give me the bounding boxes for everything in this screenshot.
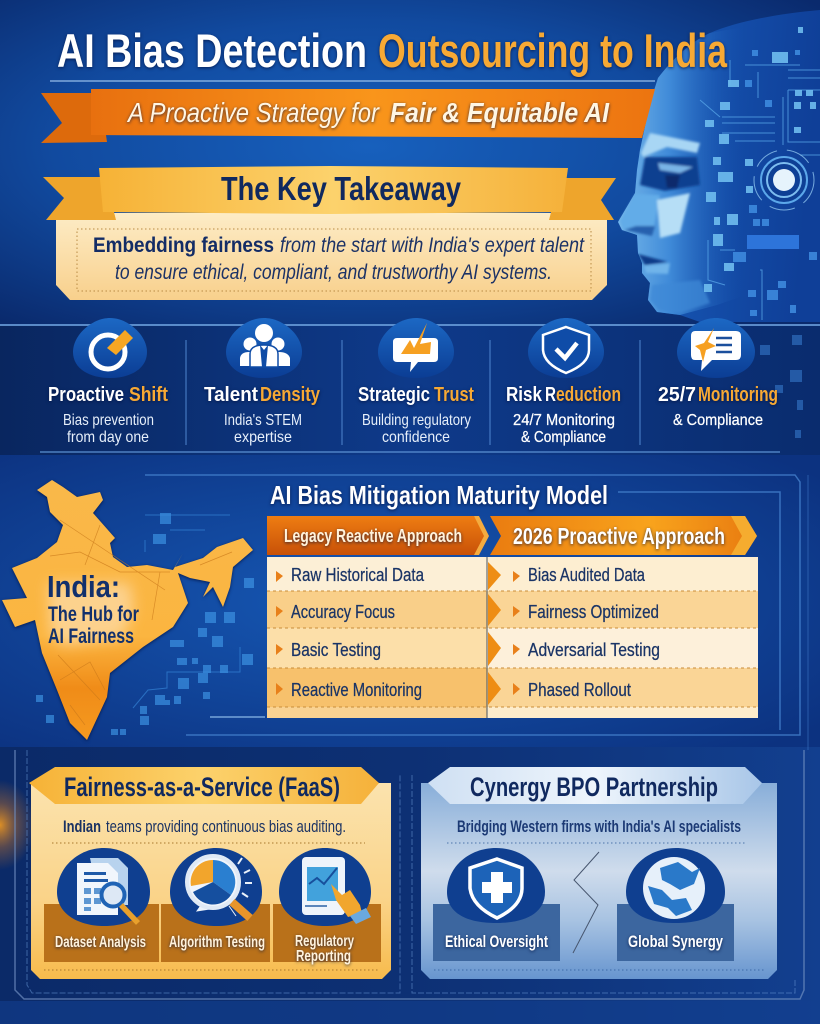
feature: strategic trust [358, 318, 474, 446]
row labels: proactive: Bias Audited Data [528, 565, 646, 585]
map label: The Hub for [48, 603, 139, 626]
service labels: Algorithm Testing [169, 934, 265, 951]
header: legacy reactive approach [267, 516, 489, 555]
feature: risk reduction: eduction [556, 384, 621, 406]
icon: shield [447, 848, 545, 923]
map label: India: [47, 569, 120, 604]
panel: cynergy partnership: Cynergy BPO Partnership [470, 772, 718, 802]
feature: proactive shift: from day one [67, 429, 149, 446]
circuit squares dim [733, 50, 817, 316]
chart heading: AI Bias Mitigation Maturity Model [270, 480, 608, 510]
feature: 25/7 monitoring: 25/7 [658, 384, 696, 406]
comparison table [267, 516, 758, 718]
map label [47, 569, 139, 648]
circuit squares bright [704, 27, 816, 292]
title [57, 24, 728, 77]
feature: talent density: India's STEM [224, 412, 302, 429]
feature: risk reduction: & Compliance [521, 429, 606, 446]
icon: speech bubble with bolt [378, 318, 454, 378]
row labels: proactive [528, 565, 660, 700]
map highlight [48, 583, 134, 646]
feature: risk reduction: 24/7 Monitoring [513, 412, 615, 429]
icon: shield check [528, 318, 604, 378]
feature: risk reduction: Risk [506, 384, 543, 406]
row labels: legacy: Accuracy Focus [291, 602, 395, 622]
header: 2026 proactive approach [490, 516, 757, 555]
circuit lines [700, 60, 820, 320]
icon: regulatory reporting [279, 848, 371, 926]
cheek [657, 193, 690, 238]
feature: 25/7 monitoring: Monitoring [698, 384, 778, 406]
row labels: legacy: Raw Historical Data [291, 565, 425, 585]
icon: globe [626, 848, 725, 923]
feature: talent density: Density [260, 384, 321, 406]
partnership labels: Ethical Oversight [445, 932, 548, 951]
service labels [55, 933, 354, 965]
mouth [638, 254, 668, 265]
table rows [267, 557, 758, 718]
panel: fairness-as-a-service [29, 767, 391, 979]
key takeaway card [56, 213, 607, 300]
feature: 25/7 monitoring: & Compliance [673, 412, 763, 429]
eye socket [640, 157, 700, 191]
icon: people [226, 318, 302, 378]
icon: message bubble [677, 318, 755, 378]
feature: strategic trust: confidence [382, 429, 450, 446]
map label: AI Fairness [48, 625, 134, 648]
key takeaway panel: to ensure ethical, compliant, and trustworthy AI systems. [115, 261, 552, 284]
service labels: Reporting [296, 948, 351, 965]
icon: algorithm testing [170, 848, 262, 926]
feature: risk reduction: R [545, 384, 556, 406]
row labels: proactive: Adversarial Testing [528, 640, 660, 660]
row labels: legacy: Basic Testing [291, 640, 381, 660]
partnership labels [445, 932, 723, 951]
feature: strategic trust: Trust [434, 384, 474, 406]
icon: dataset analysis [57, 848, 150, 926]
illustration: AI face with circuits [618, 10, 820, 322]
icon: circular arrow [73, 318, 147, 378]
key takeaway panel: from the start with India's expert talent [280, 234, 585, 257]
panel: fairness-as-a-service: Indian [63, 817, 101, 836]
subtitle ribbon: Fair & Equitable AI [390, 97, 610, 128]
row labels: legacy: Reactive Monitoring [291, 680, 422, 700]
subtitle ribbon: A Proactive Strategy for [126, 97, 380, 128]
subtitle ribbon [41, 89, 655, 143]
panel: fairness-as-a-service: Fairness-as-a-Service (FaaS) [64, 772, 340, 802]
feature: strategic trust: Building regulatory [362, 412, 471, 429]
header: legacy reactive approach: Legacy Reactive Approach [284, 526, 462, 546]
feature: risk reduction [506, 318, 621, 446]
key takeaway panel: The Key Takeaway [221, 170, 462, 207]
feature: proactive shift: Proactive [48, 384, 124, 406]
partnership labels: Global Synergy [628, 932, 723, 951]
service labels: Regulatory [295, 933, 354, 950]
map of India [2, 480, 253, 740]
feature: proactive shift [48, 318, 168, 446]
brow highlight [641, 133, 700, 157]
nose [620, 194, 660, 236]
feature: proactive shift: Shift [129, 384, 168, 406]
key takeaway panel [43, 166, 616, 300]
circuit target [754, 150, 814, 210]
feature: talent density [204, 318, 321, 446]
panel: fairness-as-a-service: teams providing continuous bias auditing. [106, 817, 346, 836]
title: AI Bias Detection [57, 24, 367, 77]
feature: talent density: expertise [234, 429, 292, 446]
feature: talent density: Talent [204, 384, 258, 406]
row labels: proactive: Phased Rollout [528, 680, 631, 700]
feature: strategic trust: Strategic [358, 384, 430, 406]
row labels: legacy [291, 565, 425, 700]
panel: cynergy partnership [421, 767, 777, 979]
header: 2026 proactive approach: 2026 Proactive Approach [513, 523, 725, 549]
key takeaway panel: Embedding fairness [93, 234, 274, 257]
feature: proactive shift: Bias prevention [63, 412, 154, 429]
row labels: proactive: Fairness Optimized [528, 602, 659, 622]
service labels: Dataset Analysis [55, 934, 146, 951]
feature: 25/7 monitoring [658, 318, 778, 429]
